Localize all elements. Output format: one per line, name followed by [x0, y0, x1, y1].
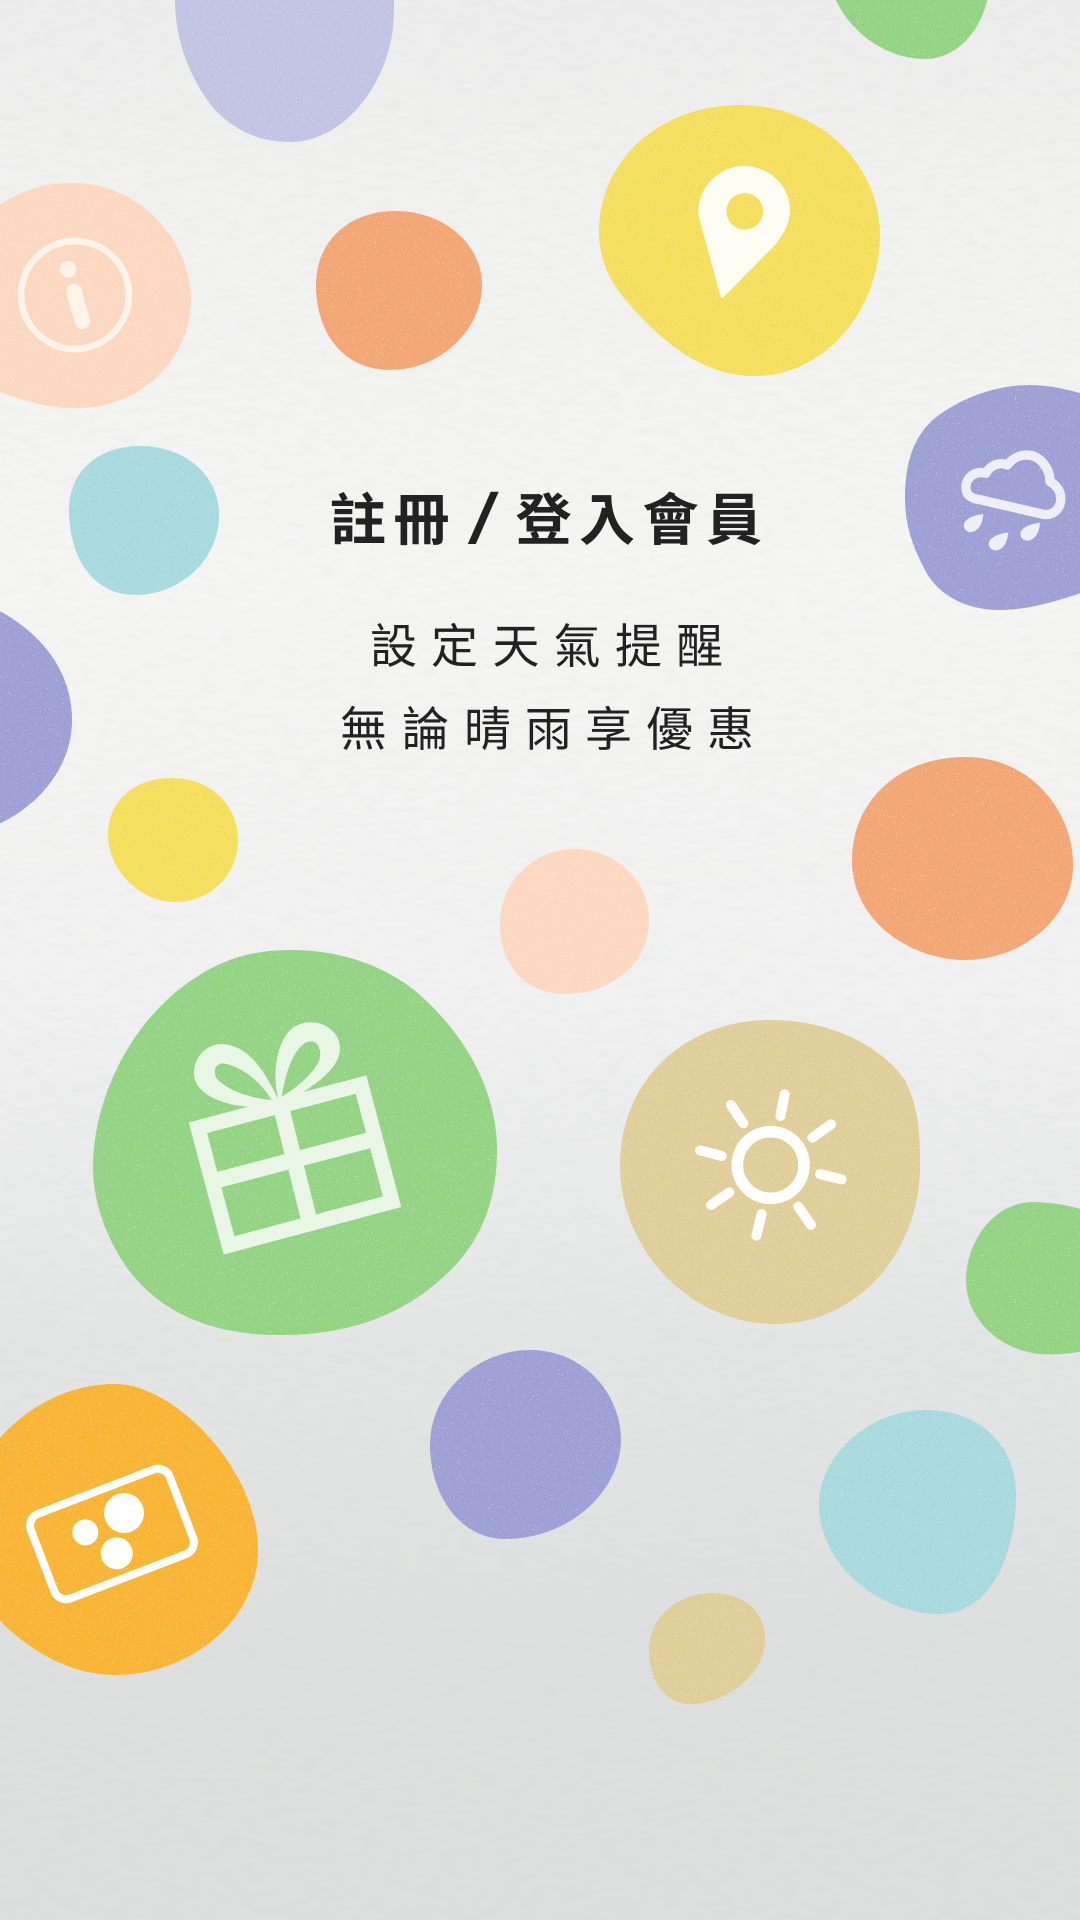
blob: lavender top: [175, 0, 394, 142]
blob: peach centre: [500, 849, 649, 994]
icon: map pin: [698, 166, 790, 298]
title: 註冊: [330, 476, 450, 557]
icon: sun: [700, 1094, 842, 1236]
blob: purple centre: [430, 1350, 621, 1539]
blob: tan with sun: [620, 1020, 920, 1324]
icon: gift: [194, 1022, 392, 1245]
blob: orange right: [852, 757, 1073, 960]
title: 登入會員: [516, 476, 762, 557]
blob: teal left: [69, 446, 219, 595]
blob: purple with cloud: [905, 385, 1080, 610]
blob: teal lower: [819, 1410, 1016, 1614]
title: [330, 476, 762, 557]
title: /: [468, 476, 501, 548]
icon: rain cloud: [964, 455, 1061, 550]
blob: green top: [832, 0, 989, 59]
subtitle line 1: 設定天氣提醒: [370, 608, 723, 677]
blob: orange top: [316, 211, 482, 370]
blob: small tan: [649, 1593, 765, 1704]
blob: purple left: [0, 606, 72, 828]
blob: orange with card: [0, 1384, 258, 1675]
blob: small yellow: [108, 778, 238, 902]
icon: info: [21, 241, 129, 349]
subtitle line 2: 無論晴雨享優惠: [340, 691, 754, 760]
blob: yellow with pin: [599, 105, 880, 376]
blob: green with gift: [93, 950, 497, 1335]
blob: peach with info: [0, 183, 191, 408]
icon: card with dots: [26, 1465, 198, 1603]
blob: green right: [966, 1202, 1080, 1354]
